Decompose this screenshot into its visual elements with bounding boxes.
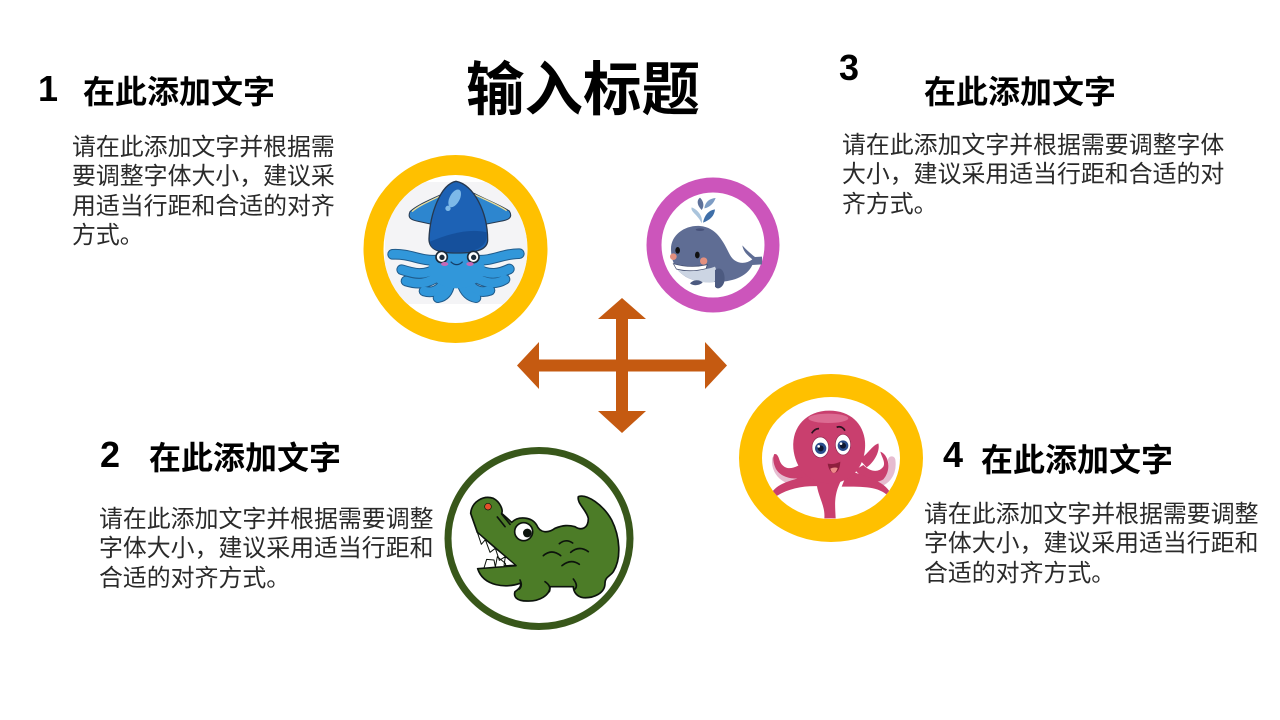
step 2 text: 字体大小，建议采用适当行距和 <box>99 535 433 562</box>
step 2 text: 请在此添加文字并根据需要调整 <box>99 506 433 533</box>
step 3 text: 请在此添加文字并根据需要调整字体 <box>842 132 1224 159</box>
step 4 text: 合适的对齐方式。 <box>924 560 1115 587</box>
step 4 text <box>924 501 1258 587</box>
step 3 heading: 在此添加文字 <box>924 74 1116 110</box>
step 4 text: 请在此添加文字并根据需要调整 <box>924 501 1258 528</box>
title: 输入标题 <box>466 58 700 123</box>
step 2 number: 2 <box>100 434 120 475</box>
icon: whale in pink ring <box>654 185 772 305</box>
step 2 text <box>99 506 433 592</box>
step 1 heading: 在此添加文字 <box>83 74 275 110</box>
step 3 text: 大小，建议采用适当行距和合适的对 <box>842 161 1224 188</box>
step 1 text: 方式。 <box>72 222 144 249</box>
step 1 text: 用适当行距和合适的对齐 <box>72 193 335 220</box>
step 3 text <box>842 132 1224 218</box>
icon: crocodile in green ring <box>448 450 630 626</box>
step 3 text: 齐方式。 <box>842 191 938 218</box>
step 4 text: 字体大小，建议采用适当行距和 <box>924 530 1258 557</box>
icon: octopus in yellow ring <box>750 386 912 530</box>
step 1 text: 要调整字体大小，建议采 <box>72 163 335 190</box>
step 2 text: 合适的对齐方式。 <box>99 565 290 592</box>
step 3 number: 3 <box>839 47 859 88</box>
step 4 heading: 在此添加文字 <box>981 442 1173 478</box>
icon: squid in yellow ring <box>374 165 538 333</box>
step 2 heading: 在此添加文字 <box>149 440 341 476</box>
step 1 text: 请在此添加文字并根据需 <box>72 134 335 161</box>
step 1 text <box>72 134 335 249</box>
step 1 number: 1 <box>38 68 58 109</box>
four-way arrow <box>517 298 727 433</box>
step 4 number: 4 <box>943 434 963 475</box>
